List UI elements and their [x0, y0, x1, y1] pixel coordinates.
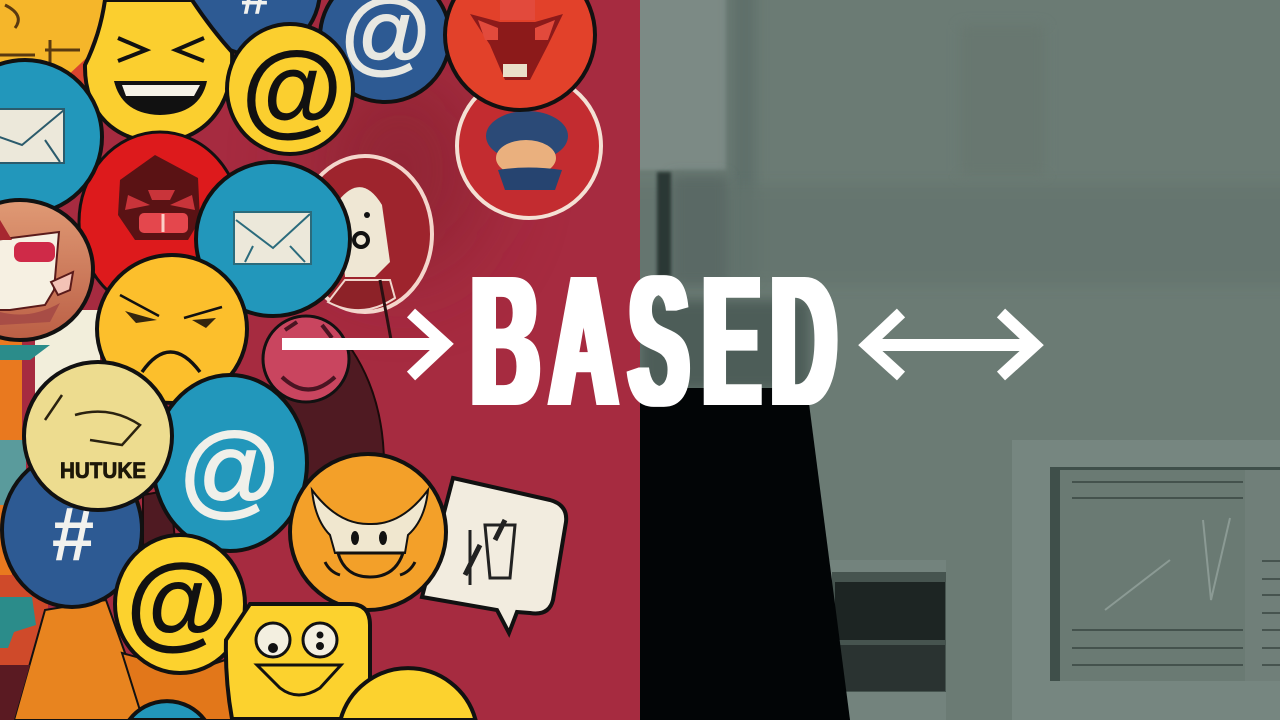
- sticker: blue envelope circle left: [0, 60, 102, 214]
- sticker: angry yellow face: [97, 255, 247, 403]
- sticker: navy hash circle: [190, 0, 320, 55]
- sticker: yellow square face: [226, 604, 370, 719]
- sticker: yellow circle bottom right: [340, 668, 476, 720]
- sticker: orange horned face: [290, 454, 446, 610]
- title: BASED: B: [471, 237, 540, 445]
- sticker: red demon circle: [79, 132, 241, 312]
- title: BASED: D: [771, 237, 836, 444]
- monitor: [1012, 440, 1280, 720]
- arrow: double-headed arrow: [867, 313, 1035, 376]
- sticker: yellow at-sign circle: @: [241, 31, 343, 147]
- sticker: blue envelope circle centre: [196, 162, 350, 316]
- sticker: tan cartoon face: [0, 200, 93, 340]
- panel: left red background with emoji collage: [0, 0, 640, 720]
- sticker: blue at-sign circle: [153, 375, 307, 551]
- title: BASED: E: [703, 237, 760, 445]
- arrow: right-pointing arrow into title: [282, 313, 445, 376]
- sticker: navy hash circle bottom: [2, 453, 142, 607]
- sticker: pink smile face: [263, 316, 349, 402]
- sticker: white-ringed red portrait circle: [457, 74, 601, 218]
- sticker: yellow at-sign circle bottom: @: [126, 543, 228, 660]
- dark brown shadow shape: [143, 340, 384, 545]
- dark equipment box: [828, 560, 946, 720]
- sticker: blue circle bottom: [129, 701, 205, 720]
- sticker: blue at-sign circle: @: [178, 413, 282, 527]
- sticker: navy at-sign circle: [320, 0, 450, 102]
- sticker: red-orange demon circle: [445, 0, 595, 110]
- sticker: cream badge: HUTUKE: [60, 458, 146, 483]
- sticker: cream badge: [24, 362, 172, 510]
- sticker: speech bubble: [422, 478, 566, 633]
- title: BASED: [471, 237, 836, 445]
- sticker: dark red ringed skull circle: [298, 156, 432, 345]
- panel: right office scene: [620, 0, 1280, 720]
- title: BASED: A: [550, 238, 617, 445]
- sticker: yellow at-sign circle bottom: [115, 535, 245, 673]
- title: BASED: S: [629, 237, 689, 445]
- sticker: top-left yellow scribble: [0, 0, 108, 95]
- base collage shapes: [0, 310, 235, 720]
- black trapezoid shape: [640, 388, 850, 720]
- sticker: navy hash circle bottom: #: [52, 492, 94, 577]
- sticker: laughing yellow face: [85, 0, 232, 142]
